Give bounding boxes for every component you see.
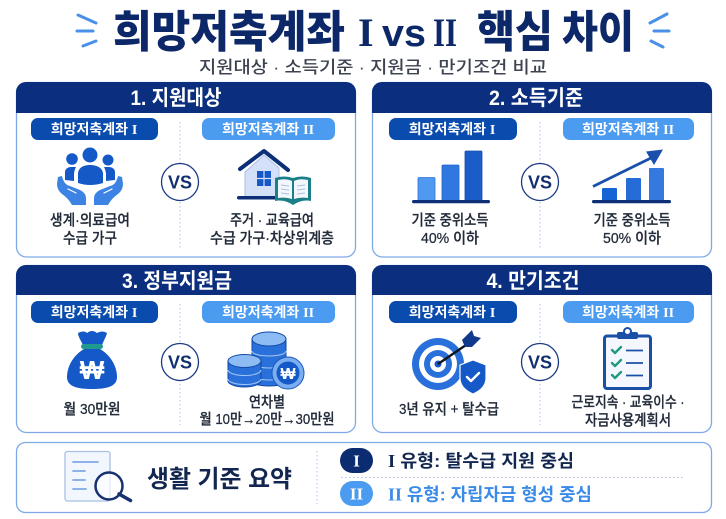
title: vs [382, 13, 426, 55]
icon: bar chart 40% [412, 151, 490, 203]
title: II [433, 10, 457, 55]
VS badge: VS [168, 172, 192, 192]
summary item I: I [353, 452, 360, 470]
VS badge: VS [168, 352, 192, 372]
icon: coin stacks [228, 332, 304, 389]
summary item II: II [350, 484, 363, 504]
text: group I: 생계·의료급여 [50, 212, 130, 229]
panel: 4. maturity conditions: 희망저축계좌 I [409, 304, 495, 321]
panel: 2. income [372, 82, 712, 257]
panel: 3. government support: 월 10만→20만→30만원 [200, 411, 334, 428]
icon: money bag: ₩ [80, 355, 105, 385]
text: support I: 월 30만원 [64, 401, 120, 418]
icon: target and shield [412, 330, 486, 394]
subtitle: 지원대상 · 소득기준 · 지원금 · 만기조건 비교 [199, 58, 547, 77]
panel 1 pill II [202, 118, 335, 140]
VS badge [522, 164, 558, 200]
panel: 1. eligibility: 1. 지원대상 [130, 87, 222, 110]
text: maturity II: 근로지속 · 교육이수 · [572, 394, 684, 411]
text: group II: 주거 · 교육급여 [230, 212, 314, 229]
summary item II [340, 481, 592, 506]
panel: 4. maturity conditions: 4. 만기조건 [486, 270, 580, 293]
VS badge: VS [528, 172, 552, 192]
icon: left title sparks [77, 15, 96, 46]
panel: 1. eligibility: 희망저축계좌 I [51, 121, 137, 138]
icon: checklist clipboard [604, 328, 650, 388]
heading: summary: 생활 기준 요약 [147, 466, 292, 493]
icon: right title sparks [650, 14, 669, 47]
panel: 1. eligibility: 수급 가구·차상위계층 [210, 230, 334, 247]
summary item I: I 유형: 탈수급 지원 중심 [388, 451, 574, 471]
icon: people in hands [57, 148, 123, 205]
panel: 4. maturity conditions: 희망저축계좌 II [582, 304, 674, 321]
panel: 1. eligibility: 희망저축계좌 II [222, 121, 314, 138]
panel 1 pill I [31, 118, 158, 140]
panel 2 header [372, 82, 712, 113]
panel: 3. government support: 3. 정부지원금 [122, 270, 232, 293]
text: support II: 연차별 [249, 394, 285, 411]
VS badge [162, 164, 198, 200]
panel: 1. eligibility: 수급 가구 [63, 230, 117, 247]
title: 차이 [562, 8, 634, 57]
panel: 3. government support: 희망저축계좌 II [222, 304, 314, 321]
panel 3 header [16, 265, 356, 295]
icon: bar chart 50% with arrow [592, 150, 671, 203]
text: income I: 기준 중위소득 [412, 212, 489, 229]
text: maturity I: 3년 유지 + 탈수급 [399, 401, 499, 418]
title: I [358, 10, 374, 55]
summary item II: II 유형: 자립자금 형성 중심 [388, 484, 592, 504]
panel 4 pill II [563, 301, 694, 323]
panel 3 pill I [31, 301, 158, 323]
title: 핵심 [477, 8, 553, 57]
panel: 3. government support [16, 265, 356, 432]
panel: 3. government support: 희망저축계좌 I [51, 304, 137, 321]
icon: house and book [237, 151, 311, 205]
panel: 2. income: 2. 소득기준 [489, 87, 583, 110]
VS badge [162, 344, 198, 380]
panel 2 pill II [563, 118, 694, 140]
panel: 4. maturity conditions [372, 265, 712, 432]
panel: 2. income: 희망저축계좌 II [582, 121, 674, 138]
panel: 2. income: 50% 이하 [603, 230, 661, 247]
panel: 4. maturity conditions: 자금사용계획서 [585, 412, 671, 429]
icon: money bag [67, 331, 117, 389]
VS badge: VS [528, 352, 552, 372]
panel: 2. income: 희망저축계좌 I [409, 121, 495, 138]
panel 2 pill I [389, 118, 517, 140]
icon: coin stacks: ₩ [280, 366, 296, 383]
icon: document with magnifier [65, 452, 130, 501]
panel 4 header [372, 265, 712, 295]
panel: 1. eligibility [16, 82, 356, 257]
panel 4 pill I [389, 301, 517, 323]
panel: summary [16, 442, 712, 512]
summary item I [340, 448, 574, 473]
title [113, 8, 634, 57]
text: income II: 기준 중위소득 [594, 212, 671, 229]
VS badge [522, 344, 558, 380]
panel: 2. income: 40% 이하 [421, 230, 479, 247]
panel 1 header [16, 82, 356, 113]
panel 3 pill II [202, 301, 335, 323]
title: 희망저축계좌 [113, 8, 345, 57]
